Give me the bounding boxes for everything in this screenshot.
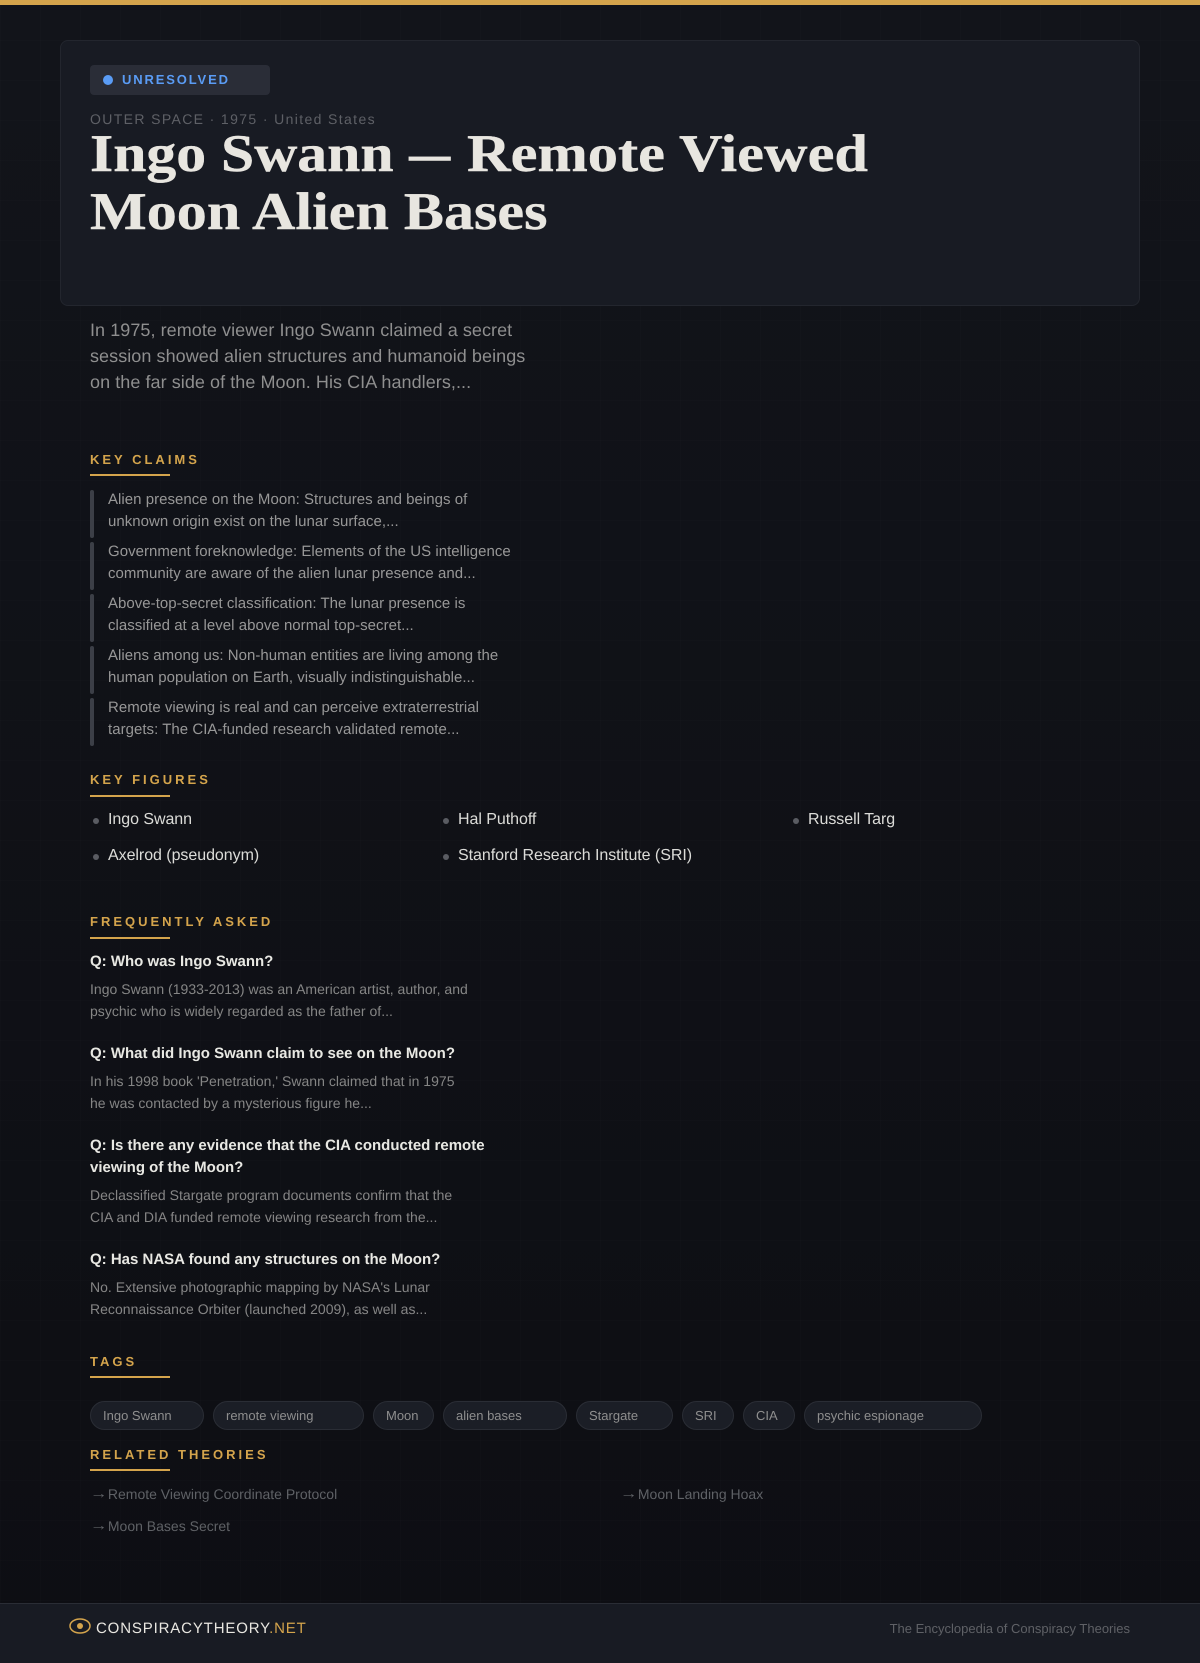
title xyxy=(90,125,868,241)
answer 4: Reconnaissance Orbiter (launched 2009), as well as... xyxy=(90,1301,427,1317)
question 3: viewing of the Moon? xyxy=(90,1159,243,1176)
claim 4 xyxy=(108,647,498,686)
answer 1 xyxy=(90,981,468,1019)
heading: tags: TAGS xyxy=(90,1354,137,1369)
intro text: In 1975, remote viewer Ingo Swann claimed a secret xyxy=(90,320,512,340)
tag xyxy=(743,1401,795,1430)
question 1: Q: Who was Ingo Swann? xyxy=(90,953,273,970)
claim 1: unknown origin exist on the lunar surface,... xyxy=(108,513,399,530)
claim 4: Aliens among us: Non-human entities are living among the xyxy=(108,647,498,664)
claim 2: Government foreknowledge: Elements of the US intelligence xyxy=(108,543,511,560)
answer 1: psychic who is widely regarded as the father of... xyxy=(90,1003,393,1019)
answer 1: Ingo Swann (1933-2013) was an American artist, author, and xyxy=(90,981,468,997)
figure: SRI: Stanford Research Institute (SRI) xyxy=(458,847,692,864)
claim 5 xyxy=(108,699,479,738)
tag: alien bases xyxy=(456,1408,522,1423)
heading: key claims: KEY CLAIMS xyxy=(90,452,200,467)
badge label: UNRESOLVED xyxy=(122,72,230,87)
panel: key figures xyxy=(93,811,895,864)
claim 4: human population on Earth, visually indistinguishable... xyxy=(108,669,475,686)
tagline: The Encyclopedia of Conspiracy Theories xyxy=(890,1621,1130,1636)
heading: key figures: KEY FIGURES xyxy=(90,772,211,787)
tag xyxy=(373,1401,434,1430)
top accent bar xyxy=(0,0,1200,5)
tag xyxy=(576,1401,673,1430)
answer 3 xyxy=(90,1187,452,1225)
figure: Ingo Swann: Ingo Swann xyxy=(108,811,192,828)
tag: Stargate xyxy=(589,1408,638,1423)
panel: header xyxy=(60,40,1140,306)
heading: frequently asked: FREQUENTLY ASKED xyxy=(90,914,273,929)
intro text xyxy=(90,320,525,392)
title: Ingo Swann xyxy=(90,125,394,183)
claim 2 xyxy=(108,543,511,582)
figure: Hal Puthoff: Hal Puthoff xyxy=(458,811,536,828)
figure: Russell Targ: Russell Targ xyxy=(808,811,895,828)
panel: key claims list xyxy=(90,490,511,746)
title: — xyxy=(409,125,450,183)
status badge xyxy=(90,65,270,95)
claim 2: community are aware of the alien lunar presence and... xyxy=(108,565,476,582)
category line: OUTER SPACE · 1975 · United States xyxy=(90,111,376,127)
answer 3: CIA and DIA funded remote viewing research from the... xyxy=(90,1209,437,1225)
title: Moon Alien Bases xyxy=(90,183,547,241)
answer 2: he was contacted by a mysterious figure he... xyxy=(90,1095,372,1111)
related link 2: Moon Landing Hoax xyxy=(638,1486,763,1502)
claim 5: Remote viewing is real and can perceive extraterrestrial xyxy=(108,699,479,716)
answer 4: No. Extensive photographic mapping by NASA's Lunar xyxy=(90,1279,430,1295)
answer 2: In his 1998 book 'Penetration,' Swann claimed that in 1975 xyxy=(90,1073,455,1089)
tag: CIA xyxy=(756,1408,778,1423)
question 4: Q: Has NASA found any structures on the Moon? xyxy=(90,1251,440,1268)
related link 3: Moon Bases Secret xyxy=(108,1518,230,1534)
tag xyxy=(90,1401,204,1430)
intro text: session showed alien structures and humanoid beings xyxy=(90,346,525,366)
intro text: on the far side of the Moon. His CIA handlers,... xyxy=(90,372,471,392)
answer 4 xyxy=(90,1279,430,1317)
tag: SRI xyxy=(695,1408,717,1423)
heading: related theories: RELATED THEORIES xyxy=(90,1447,268,1462)
panel: tags xyxy=(90,1401,982,1430)
answer 3: Declassified Stargate program documents confirm that the xyxy=(90,1187,452,1203)
title: Remote Viewed xyxy=(467,125,868,183)
icon: eye logo xyxy=(69,1618,91,1634)
tag: remote viewing xyxy=(226,1408,313,1423)
figure: Axelrod: Axelrod (pseudonym) xyxy=(108,847,259,864)
footer xyxy=(0,1603,1200,1663)
question 3: Q: Is there any evidence that the CIA conducted remote xyxy=(90,1137,485,1154)
claim 3: classified at a level above normal top-secret... xyxy=(108,617,414,634)
tag xyxy=(443,1401,567,1430)
question 3 xyxy=(90,1137,485,1176)
brand name: CONSPIRACYTHEORY.NET xyxy=(96,1620,307,1637)
related link 2: → xyxy=(620,1485,638,1501)
tag: Moon xyxy=(386,1408,419,1423)
claim 5: targets: The CIA-funded research validated remote... xyxy=(108,721,459,738)
claim 1: Alien presence on the Moon: Structures and beings of xyxy=(108,491,467,508)
tag xyxy=(804,1401,982,1430)
answer 2 xyxy=(90,1073,455,1111)
claim 3: Above-top-secret classification: The lunar presence is xyxy=(108,595,465,612)
related link 1: Remote Viewing Coordinate Protocol xyxy=(108,1486,337,1502)
claim 1 xyxy=(108,491,468,530)
claim 3 xyxy=(108,595,465,634)
question 2: Q: What did Ingo Swann claim to see on the Moon? xyxy=(90,1045,455,1062)
tag: psychic espionage xyxy=(817,1408,924,1423)
tag xyxy=(682,1401,734,1430)
related link 1: → xyxy=(90,1485,108,1501)
icon: status dot xyxy=(103,75,113,85)
tag xyxy=(213,1401,364,1430)
related link 3: → xyxy=(90,1517,108,1533)
tag: Ingo Swann xyxy=(103,1408,172,1423)
